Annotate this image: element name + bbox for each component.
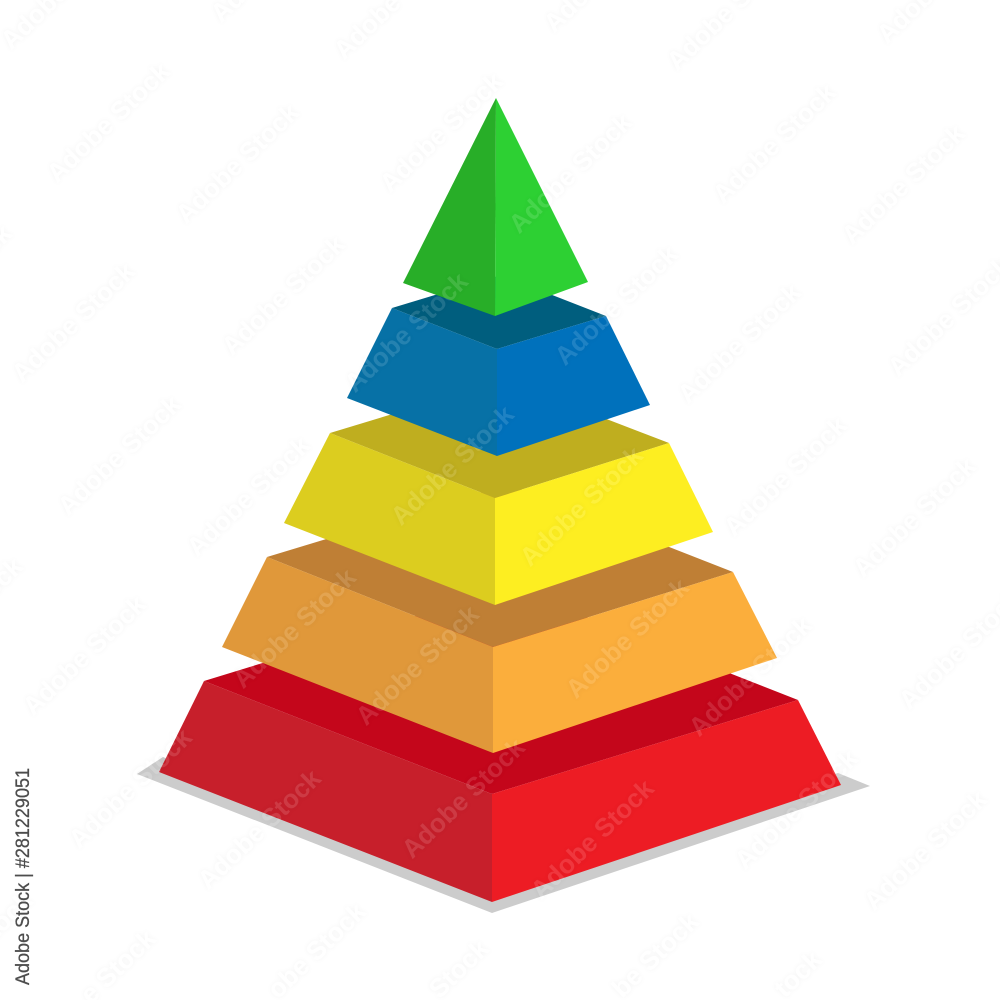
watermark pattern: Adobe Stock [728, 743, 864, 875]
watermark pattern: Adobe Stock [191, 763, 327, 895]
watermark pattern: Adobe Stock [215, 229, 351, 361]
watermark pattern: Adobe Stock [16, 589, 152, 721]
watermark pattern: Adobe Stock [846, 451, 982, 583]
tier 4: blue [347, 275, 650, 456]
watermark pattern: Adobe Stock [857, 784, 993, 916]
tier 1: red base [159, 587, 841, 902]
watermark pattern: Adobe Stock [717, 410, 853, 542]
watermark pattern: Adobe Stock [513, 440, 649, 572]
watermark pattern: Adobe Stock [671, 277, 807, 409]
watermark pattern: Adobe Stock [226, 562, 362, 694]
watermark pattern: Adobe Stock [502, 107, 638, 239]
tier 2: orange [222, 484, 777, 753]
watermark pattern: Adobe Stock [349, 599, 485, 731]
watermark pattern: Adobe Stock [40, 56, 176, 188]
tier 5: green apex [403, 98, 588, 316]
watermark pattern: Adobe Stock [51, 389, 187, 521]
stock id label: Adobe Stock | #281229051 [13, 768, 34, 985]
watermark pattern: Adobe Stock [169, 97, 305, 229]
watermark pattern: Adobe Stock [62, 722, 198, 854]
tier 3: yellow [284, 380, 713, 605]
watermark pattern: Adobe Stock [338, 266, 474, 398]
watermark pattern: Adobe Stock [384, 399, 520, 531]
watermark pattern: Adobe Stock [559, 572, 695, 704]
watermark pattern: Adobe Stock [835, 118, 971, 250]
watermark pattern: Adobe Stock [706, 77, 842, 209]
watermark pattern: Adobe Stock [548, 239, 684, 371]
ground shadow [137, 757, 870, 913]
pyramid [159, 98, 841, 902]
watermark pattern: Adobe Stock [524, 773, 660, 905]
watermark pattern: Adobe Stock [395, 732, 531, 864]
watermark pattern: Adobe Stock [682, 610, 818, 742]
watermark pattern: Adobe Stock [373, 66, 509, 198]
watermark pattern: Adobe Stock [180, 430, 316, 562]
watermark pattern: Adobe Stock [5, 256, 141, 388]
